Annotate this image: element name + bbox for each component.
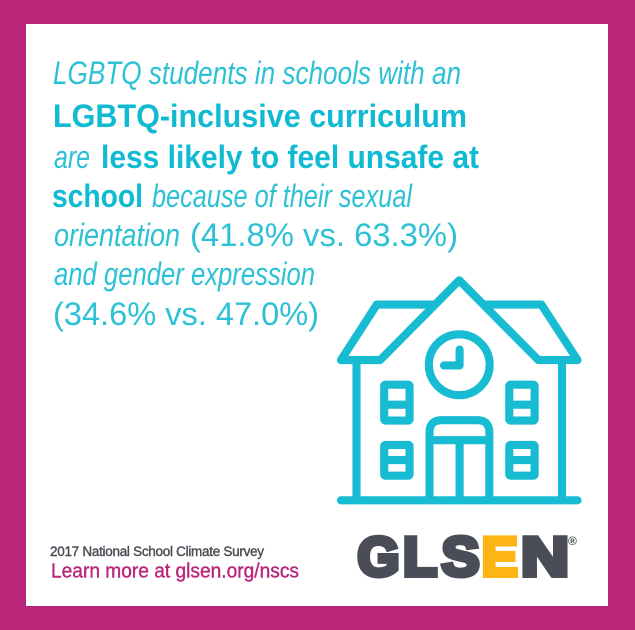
main statement text: because of their sexual <box>152 178 413 214</box>
main statement text <box>52 55 479 332</box>
main statement text: and gender expression <box>54 256 315 292</box>
GLSEN logo: S <box>442 526 480 588</box>
GLSEN logo: L <box>403 526 437 588</box>
GLSEN logo: G <box>358 526 400 588</box>
main statement text: less likely to feel unsafe at <box>101 139 479 175</box>
main statement text: LGBTQ students in schools with an <box>53 55 461 91</box>
GLSEN logo <box>358 526 577 588</box>
survey credit: 2017 National School Climate Survey <box>50 544 264 559</box>
GLSEN logo: E <box>482 526 518 588</box>
main statement text: LGBTQ-inclusive curriculum <box>53 98 467 134</box>
icon: school building <box>341 280 578 500</box>
GLSEN logo: N <box>521 526 569 588</box>
GLSEN logo: ® <box>568 534 577 548</box>
learn more link: Learn more at glsen.org/nscs <box>51 560 299 582</box>
main statement text: orientation <box>54 217 180 253</box>
main statement text: are <box>54 139 90 175</box>
main statement text: school <box>52 178 143 214</box>
main statement text: (34.6% vs. 47.0%) <box>53 296 319 332</box>
main statement text: (41.8% vs. 63.3%) <box>190 217 458 253</box>
